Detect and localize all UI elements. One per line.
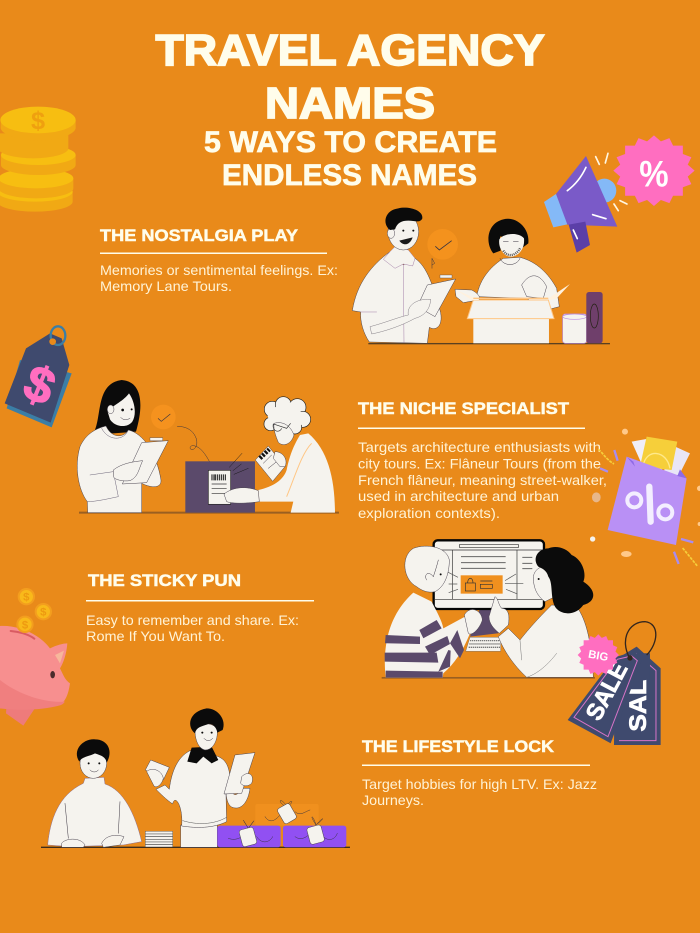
icon: piggy bank with coins: $ bbox=[40, 607, 47, 619]
title bbox=[156, 26, 544, 128]
cardboard box bbox=[455, 284, 570, 343]
computer monitor bbox=[434, 540, 544, 651]
icon: megaphone and percent badge bbox=[544, 135, 695, 253]
standing man bbox=[145, 708, 255, 847]
older woman checking label bbox=[224, 397, 335, 513]
text: sticky pun description: Easy to remember and share. Ex: bbox=[86, 612, 299, 628]
text: niche description bbox=[358, 439, 607, 521]
parcel with label bbox=[185, 453, 255, 513]
icon: coin stack: $ bbox=[31, 107, 45, 135]
icon: sale tags: SALE bbox=[625, 662, 652, 732]
heading: the lifestyle lock: THE LIFESTYLE LOCK bbox=[362, 737, 555, 756]
parcels with tags bbox=[217, 801, 346, 847]
text: niche description: Targets architecture enthusiasts with bbox=[358, 439, 601, 455]
text: lifestyle description: Target hobbies for high LTV. Ex: Jazz bbox=[362, 776, 597, 792]
jar and bottle bbox=[563, 292, 603, 343]
icon: percent starburst: % bbox=[639, 154, 669, 195]
subtitle bbox=[204, 126, 497, 192]
icon: percent starburst bbox=[613, 135, 695, 206]
heading: the nostalgia play: THE NOSTALGIA PLAY bbox=[100, 226, 299, 245]
illustration: two people packing a box bbox=[352, 208, 610, 344]
text: niche description: exploration contexts). bbox=[358, 505, 500, 521]
subtitle: ENDLESS NAMES bbox=[222, 159, 477, 192]
icon: piggy bank with coins: $ bbox=[23, 592, 30, 604]
icon: sale tags bbox=[568, 622, 661, 745]
heading: the niche specialist: THE NICHE SPECIALIST bbox=[358, 399, 570, 418]
title: TRAVEL AGENCY bbox=[156, 26, 544, 75]
text: nostalgia description: Memories or sentimental feelings. Ex: bbox=[100, 262, 338, 278]
man with clipboard bbox=[352, 208, 458, 343]
text: lifestyle description bbox=[362, 776, 597, 808]
icon: dollar price tag bbox=[5, 326, 72, 427]
stack of papers bbox=[145, 831, 173, 847]
icon: shopping bag with percent and confetti bbox=[590, 429, 700, 566]
icon: piggy bank with coins: $ bbox=[22, 619, 29, 631]
illustration: two people with parcels and tags bbox=[41, 708, 350, 848]
icon: piggy bank with coins bbox=[0, 589, 70, 726]
woman with clipboard bbox=[77, 380, 176, 513]
man opening box bbox=[455, 219, 559, 310]
heading: the sticky pun: THE STICKY PUN bbox=[88, 571, 241, 590]
text: lifestyle description: Journeys. bbox=[362, 792, 424, 808]
man in striped sweater bbox=[385, 546, 482, 678]
badge: big: BIG bbox=[587, 649, 609, 664]
illustration: two people at a computer bbox=[382, 540, 595, 679]
text: sticky pun description: Rome If You Want To. bbox=[86, 628, 225, 644]
illustration: woman with clipboard and woman scanning parcel bbox=[77, 380, 339, 514]
icon: sale tags: SALE bbox=[581, 658, 634, 725]
text: niche description: city tours. Ex: Flâneur Tours (from the bbox=[358, 456, 601, 472]
icon: dollar price tag: $ bbox=[16, 354, 63, 416]
title: NAMES bbox=[265, 79, 435, 128]
text: nostalgia description bbox=[100, 262, 338, 294]
icon: coin stack bbox=[0, 107, 76, 212]
seated person bbox=[48, 739, 142, 847]
text: niche description: French flâneur, meaning street-walker, bbox=[358, 472, 607, 488]
text: sticky pun description bbox=[86, 612, 299, 644]
woman with curly black hair bbox=[489, 547, 593, 677]
text: niche description: used in architecture and urban bbox=[358, 488, 559, 504]
text: nostalgia description: Memory Lane Tours. bbox=[100, 278, 232, 294]
subtitle: 5 WAYS TO CREATE bbox=[204, 126, 497, 159]
